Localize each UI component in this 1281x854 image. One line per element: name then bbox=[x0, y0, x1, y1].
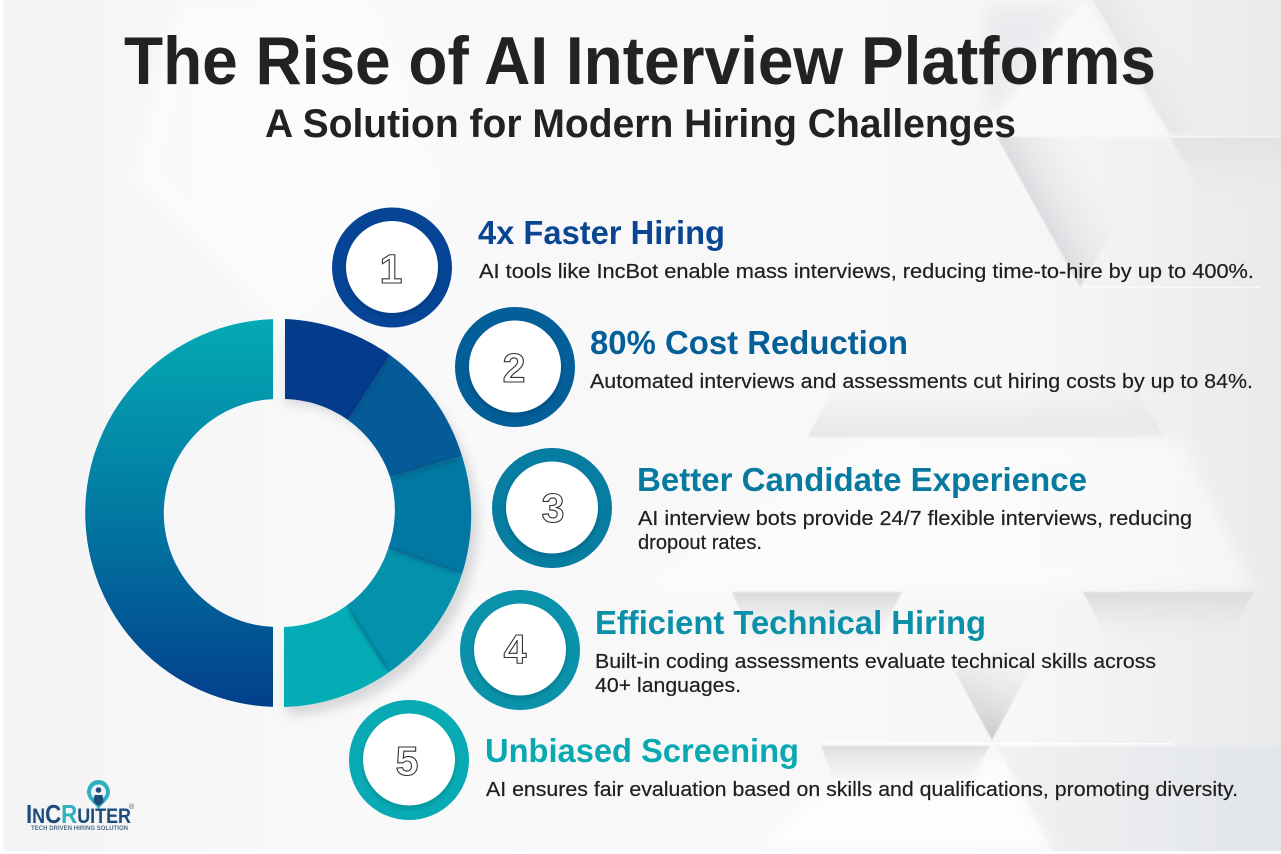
heading 1: 4x Faster Hiring bbox=[478, 214, 725, 251]
heading 4: Efficient Technical Hiring bbox=[595, 604, 986, 641]
segment 4 bbox=[346, 549, 462, 673]
number badge 2 bbox=[455, 307, 575, 427]
item 5 bbox=[349, 700, 1238, 820]
heading 3: Better Candidate Experience bbox=[637, 461, 1087, 498]
title: The Rise of AI Interview Platforms bbox=[124, 23, 1156, 99]
donut chart bbox=[85, 319, 478, 715]
heading 2: 80% Cost Reduction bbox=[590, 324, 908, 361]
registered mark: ® bbox=[129, 803, 135, 811]
logo wordmark: INCRUITER bbox=[26, 799, 131, 829]
number badge 5 bbox=[349, 700, 469, 820]
item 4: 40+ languages. bbox=[595, 675, 741, 697]
description 1: AI tools like IncBot enable mass interviews, reducing time-to-hire by up to 400%. bbox=[479, 261, 1254, 283]
number badge 3 bbox=[492, 448, 612, 568]
description 5: AI ensures fair evaluation based on skills and qualifications, promoting diversity. bbox=[486, 779, 1238, 801]
number badge 2: 2 bbox=[503, 345, 525, 391]
segment 2 bbox=[348, 355, 462, 477]
donut drop shadow bbox=[287, 333, 478, 715]
logo: InCruiter bbox=[26, 780, 135, 832]
item 4 bbox=[460, 590, 1156, 710]
number badge 3: 3 bbox=[542, 485, 564, 531]
segment 3 bbox=[388, 456, 471, 574]
item 2 bbox=[455, 307, 1253, 427]
segment 1 bbox=[285, 319, 390, 420]
icon: location pin bbox=[87, 780, 110, 809]
number badge 5: 5 bbox=[396, 738, 418, 784]
item 3 bbox=[492, 448, 1192, 568]
description 4: Built-in coding assessments evaluate technical skills across bbox=[595, 651, 1156, 673]
number badge 1: 1 bbox=[380, 246, 402, 292]
item 3: dropout rates. bbox=[638, 532, 762, 554]
left half of donut bbox=[85, 319, 273, 707]
description 2: Automated interviews and assessments cut hiring costs by up to 84%. bbox=[590, 371, 1253, 393]
description 3: AI interview bots provide 24/7 flexible interviews, reducing bbox=[638, 508, 1192, 530]
segment 5 bbox=[284, 606, 388, 707]
item 1 bbox=[332, 208, 1254, 328]
subtitle: A Solution for Modern Hiring Challenges bbox=[265, 102, 1016, 146]
number badge 4: 4 bbox=[504, 626, 527, 672]
heading 5: Unbiased Screening bbox=[485, 732, 799, 769]
number badge 1 bbox=[332, 208, 452, 328]
logo tagline: TECH DRIVEN HIRING SOLUTION bbox=[31, 826, 128, 832]
number badge 4 bbox=[460, 590, 580, 710]
